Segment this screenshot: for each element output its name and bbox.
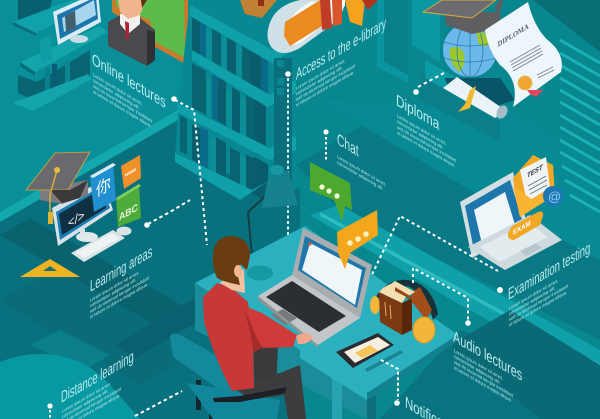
- icon: monitor with video lecture: [53, 0, 101, 45]
- heading: access to the e-library: Lorem ipsum dolor sit amet,: [296, 58, 345, 91]
- dotted connector: online lectures: [171, 96, 207, 245]
- heading: chat: Lorem ipsum dolor sit amet,: [337, 154, 386, 187]
- icon: diploma certificate: DIPLOMA: [497, 21, 529, 49]
- heading: diploma: sed do eiusmod tempor incididunt: [397, 124, 457, 164]
- main laptop: [258, 228, 372, 348]
- icon: globe: [443, 23, 515, 108]
- icon: green ABC block: [116, 184, 141, 227]
- heading: chat: [337, 131, 386, 193]
- heading: diploma: Lorem ipsum dolor sit amet,: [397, 113, 446, 146]
- icon: orange WWW block: [121, 155, 141, 189]
- heading: distance learning: [61, 348, 134, 419]
- heading: online lectures: consectetur adipiscing elit,: [93, 78, 140, 111]
- icon: rolled scroll: [443, 77, 510, 121]
- heading: examination testing: consectetur adipiscing elit,: [509, 285, 556, 317]
- icon: test envelope: TEST: [527, 164, 543, 180]
- icon: graduation cap: [26, 152, 90, 224]
- icon: test envelope: @: [548, 189, 561, 204]
- lamp base: [247, 266, 273, 280]
- heading: audio lectures: Lorem ipsum dolor sit amet,: [454, 348, 503, 381]
- dotted connector: examination testing: [367, 216, 503, 293]
- heading: learning areas: ut labore et dolore magna aliqua.: [90, 281, 148, 320]
- icon: test envelope: [513, 155, 563, 217]
- heading: learning areas: Lorem ipsum dolor sit amet,: [90, 270, 139, 303]
- heading: learning areas: consectetur adipiscing elit,: [90, 277, 137, 309]
- icon: exam badge: [508, 212, 543, 240]
- heading: access to the e-library: sed do eiusmod tempor incididunt: [296, 63, 356, 102]
- heading: access to the e-library: [296, 15, 386, 108]
- heading: online lectures: sed do eiusmod tempor incididunt: [93, 83, 153, 124]
- heading: diploma: ut labore et dolore magna aliqua.: [397, 130, 455, 168]
- dotted connector: learning areas: [144, 200, 190, 228]
- icon: green ABC block: ABC: [119, 202, 138, 224]
- icon: green chat bubble: [310, 162, 352, 222]
- icon: orange WWW block: www: [124, 166, 137, 179]
- person: [203, 236, 306, 419]
- dotted connector: notifications: [381, 360, 400, 406]
- top-left shelves: [13, 0, 108, 111]
- desk: [195, 226, 458, 419]
- dotted connector: diploma: [413, 73, 444, 95]
- heading: access to the e-library: consectetur adipiscing elit,: [296, 65, 343, 97]
- icon: keyboard and mouse: [71, 226, 132, 262]
- heading: online lectures: Online lectures: [92, 50, 166, 112]
- heading: distance learning: Lorem ipsum dolor sit amet,: [62, 381, 111, 414]
- lamp: [248, 165, 298, 268]
- heading: audio lectures: ut labore et dolore magna aliqua.: [454, 365, 512, 403]
- icon: language block: [90, 163, 116, 212]
- heading: chat: consectetur adipiscing elit.: [337, 160, 384, 191]
- heading: diploma: consectetur adipiscing elit,: [397, 119, 444, 150]
- pillar and window frame: [377, 0, 500, 142]
- heading: diploma: Diploma: [396, 92, 439, 134]
- heading: examination testing: sed do eiusmod tempor incididunt: [509, 283, 569, 322]
- icon: learning-area monitor: </>: [68, 207, 84, 231]
- icon: e-library database and books: [268, 0, 378, 53]
- heading: audio lectures: sed do eiusmod tempor incididunt: [454, 359, 514, 399]
- icon: exam laptop: [460, 172, 562, 270]
- icon: exam badge: EXAM: [513, 220, 531, 237]
- chair: [170, 333, 280, 419]
- heading: distance learning: consectetur adipiscing elit,: [62, 388, 109, 419]
- right wall window stripes: [560, 40, 600, 212]
- icon: triangle ruler: [20, 259, 80, 277]
- heading: learning areas: [90, 243, 152, 320]
- icon: smartphone with notification: [336, 333, 403, 372]
- icon: graduation cap on globe: [423, 0, 503, 34]
- heading: online lectures: Lorem ipsum dolor sit amet,: [93, 72, 142, 106]
- heading: diploma: [396, 92, 457, 169]
- icon: diploma certificate: [485, 2, 562, 107]
- heading: audio lectures: Audio lectures: [453, 328, 522, 385]
- heading: audio lectures: consectetur adipiscing elit,: [454, 354, 501, 385]
- heading: examination testing: Lorem ipsum dolor sit amet,: [509, 278, 558, 311]
- heading: examination testing: ut labore et dolore magna aliqua.: [509, 289, 567, 328]
- bookcase: [175, 0, 296, 202]
- icon: language block: 你: [96, 174, 111, 201]
- icon: learning-area monitor: [52, 180, 113, 246]
- heading: access to the e-library: ut labore et dolore magna aliqua.: [296, 69, 354, 108]
- heading: online lectures: ut labore et dolore magna aliqua.: [93, 89, 151, 129]
- heading: examination testing: [508, 239, 590, 328]
- heading: distance learning: Distance learning: [61, 348, 134, 407]
- heading: learning areas: sed do eiusmod tempor incididunt: [90, 275, 150, 314]
- dotted connector: distance learning: [47, 391, 182, 419]
- dotted connector: chat: [323, 129, 329, 160]
- dotted connector: audio lectures: [413, 268, 471, 326]
- heading: chat: Chat: [337, 131, 359, 161]
- teacher and chalkboard: [108, 0, 189, 66]
- icon: audio books and headphones: [370, 280, 438, 343]
- heading: learning areas: Learning areas: [90, 243, 152, 296]
- icon: orange chat bubble: [337, 210, 378, 269]
- dotted connector: e-library: [285, 71, 291, 255]
